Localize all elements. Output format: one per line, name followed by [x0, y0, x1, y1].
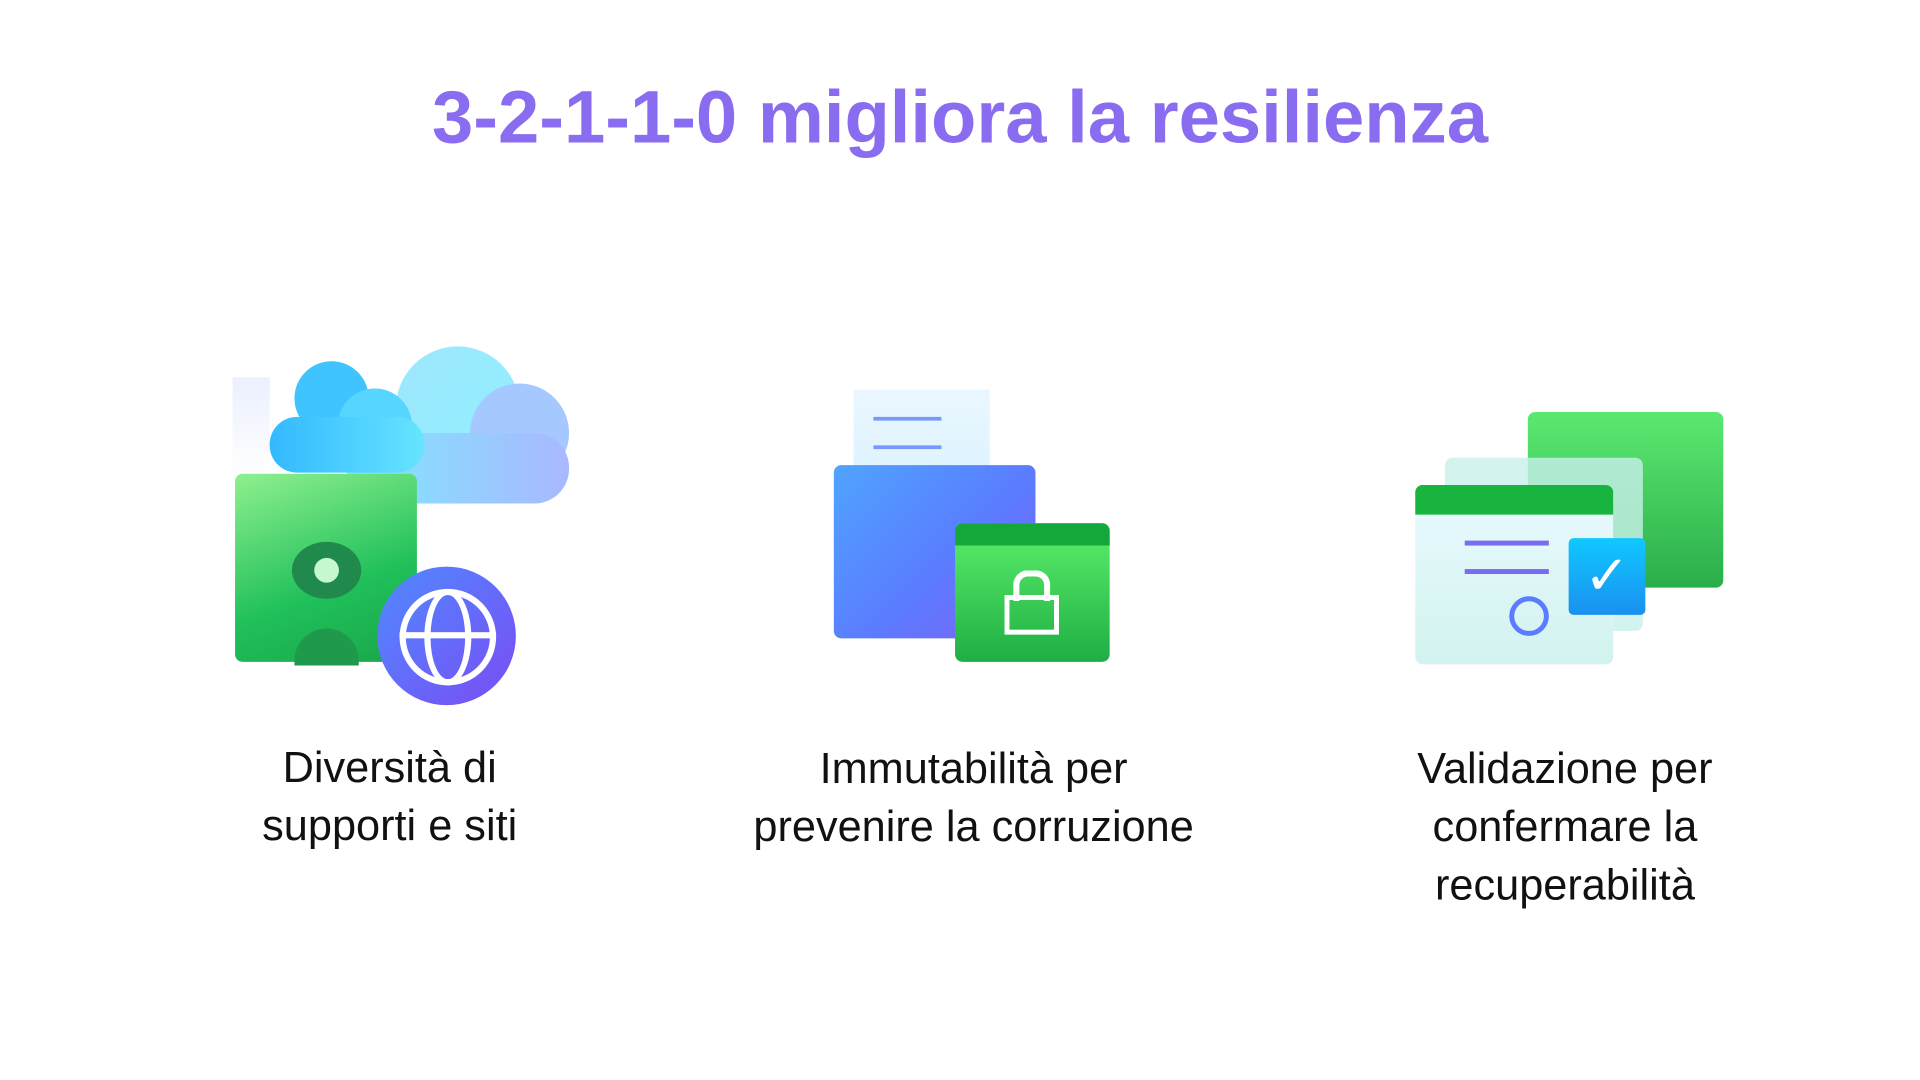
icon: folder with lock	[834, 390, 1110, 662]
label 2: prevenire la corruzione	[753, 803, 1194, 851]
label 1: supporti e siti	[262, 802, 517, 850]
label 3	[1417, 745, 1713, 909]
icon: storage with cloud and globe	[232, 346, 570, 706]
globe	[377, 567, 516, 705]
label 1	[262, 743, 517, 850]
cloud front	[270, 361, 424, 473]
cloud back	[346, 346, 570, 504]
label 2: Immutabilità per	[820, 745, 1128, 793]
title: 3-2-1-1-0 migliora la resilienza	[432, 75, 1488, 158]
label 2	[753, 745, 1194, 851]
drive	[235, 474, 417, 662]
label 3: Validazione per	[1417, 745, 1713, 793]
label 3: recuperabilità	[1435, 861, 1695, 909]
icon: validation windows	[1415, 412, 1724, 664]
icon: validation windows: ✓	[1584, 546, 1630, 606]
label 1: Diversità di	[283, 743, 497, 792]
label 3: confermare la	[1433, 803, 1697, 851]
